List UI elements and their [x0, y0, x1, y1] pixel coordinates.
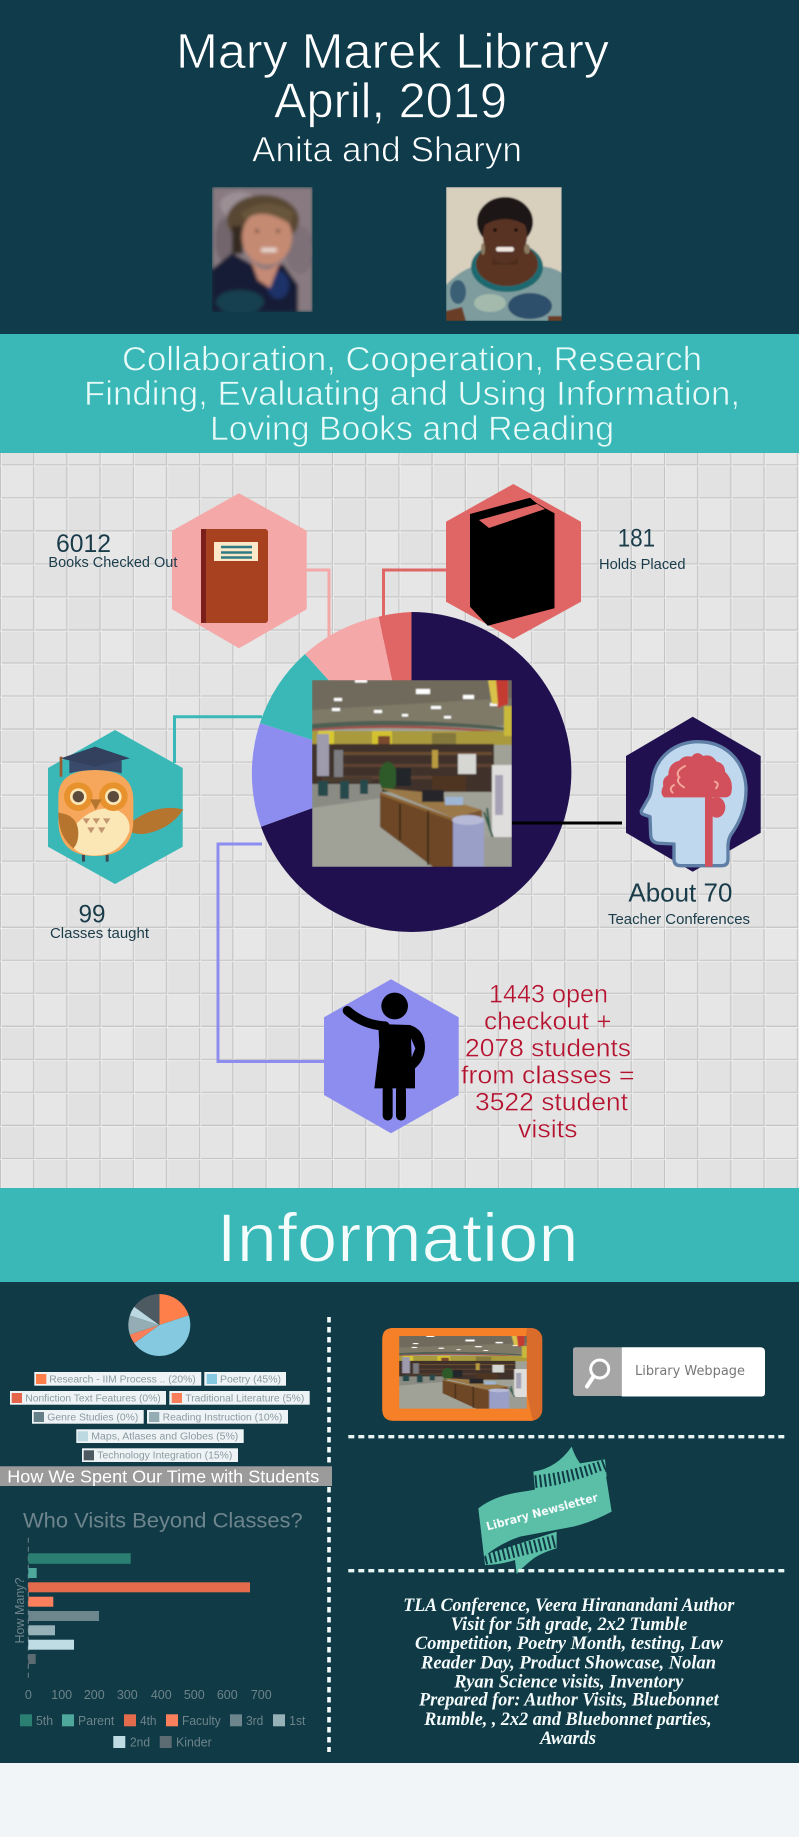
- vertical dotted divider: [327, 1317, 331, 1752]
- text block: events: Ryan Science visits, Inventory: [453, 1671, 684, 1692]
- axis values: 400: [151, 1688, 172, 1702]
- title: April, 2019: [274, 74, 507, 128]
- text block: events: Rumble, , 2x2 and Bluebonnet parties,: [423, 1709, 712, 1730]
- bar chart legend: Kinder: [176, 1736, 212, 1750]
- pie legend: Technology Integration (15%): [97, 1451, 232, 1462]
- stat: teacher conferences: [608, 878, 750, 928]
- text block: events: Competition, Poetry Month, testing, Law: [415, 1633, 723, 1654]
- title: [176, 25, 610, 170]
- connector: classes taught: [174, 717, 262, 763]
- ribbon: library newsletter: [478, 1447, 612, 1574]
- search box: library webpage: [573, 1347, 765, 1396]
- icon: student hexagon: [324, 979, 459, 1133]
- pie legend: Maps, Atlases and Globes (5%): [91, 1432, 238, 1443]
- footer strip: [0, 1763, 799, 1837]
- connector: teacher conferences: [512, 822, 622, 824]
- bar chart legend: 5th: [36, 1714, 53, 1728]
- icon: black book hexagon: [446, 484, 581, 639]
- pie legend: Nonfiction Text Features (0%): [25, 1393, 161, 1404]
- stat: teacher conferences: Teacher Conferences: [608, 911, 750, 928]
- pie legend: Poetry (45%): [220, 1374, 281, 1385]
- axis values: 0: [25, 1688, 32, 1702]
- heading band: Information: [0, 1188, 799, 1282]
- banner: themes: Collaboration, Cooperation, Research: [122, 340, 702, 378]
- stat: student visits: checkout +: [484, 1007, 612, 1035]
- icon: head with brain hexagon: [626, 717, 761, 872]
- stat: books checked out: 6012: [56, 530, 111, 558]
- pie legend: Reading Instruction (10%): [163, 1412, 282, 1423]
- bar chart legend: 4th: [140, 1714, 157, 1728]
- axis values: 100: [51, 1688, 72, 1702]
- framed library photo: [382, 1328, 542, 1421]
- caption: how we spent our time: How We Spent Our Time with Students: [7, 1466, 320, 1486]
- stat: teacher conferences: About 70: [628, 878, 732, 908]
- text block: events: [403, 1595, 735, 1749]
- axis values: [25, 1688, 272, 1702]
- search box: library webpage: Library Webpage: [635, 1364, 745, 1379]
- banner: themes: Finding, Evaluating and Using Information,: [84, 375, 740, 413]
- axis values: 300: [117, 1688, 138, 1702]
- dashed divider lower: [348, 1569, 784, 1572]
- bar chart legend: Faculty: [182, 1714, 221, 1728]
- bar chart legend: [20, 1714, 306, 1750]
- title: Mary Marek Library: [176, 25, 610, 79]
- pie legend: Genre Studies (0%): [47, 1412, 138, 1423]
- icon: red book hexagon: [172, 493, 307, 648]
- text block: events: Awards: [539, 1728, 596, 1749]
- pie chart: time with students: [128, 1294, 190, 1356]
- icon: owl hexagon: [48, 730, 183, 884]
- text block: events: Prepared for: Author Visits, Bluebonnet: [418, 1690, 719, 1711]
- stat: classes taught: [50, 900, 150, 942]
- stat: student visits: [461, 980, 634, 1144]
- panel: information section background: [0, 1282, 799, 1763]
- stat: books checked out: [48, 530, 178, 571]
- icon: magnifier: [587, 1360, 609, 1386]
- heading: who visits beyond classes: Who Visits Beyond Classes?: [23, 1509, 303, 1533]
- connector: student visits: [218, 844, 326, 1062]
- banner: themes: [0, 334, 799, 453]
- header panel: [0, 0, 799, 334]
- title: Anita and Sharyn: [252, 130, 522, 170]
- stat: holds placed: 181: [618, 525, 655, 553]
- axis label: How Many?: [13, 1577, 27, 1644]
- library photo: [312, 680, 512, 867]
- stat: classes taught: 99: [78, 900, 106, 928]
- bar chart legend: 1st: [289, 1714, 306, 1728]
- text block: events: Visit for 5th grade, 2x2 Tumble: [451, 1614, 688, 1635]
- stat: holds placed: Holds Placed: [599, 556, 686, 573]
- stat: student visits: 3522 student: [475, 1089, 628, 1117]
- stat: books checked out: Books Checked Out: [48, 554, 178, 571]
- axis values: 700: [251, 1688, 272, 1702]
- text block: events: TLA Conference, Veera Hiranandani Author: [403, 1595, 735, 1616]
- stat: student visits: 1443 open: [489, 980, 608, 1008]
- pie chart with library photo: [252, 612, 571, 932]
- heading band: Information: Information: [217, 1200, 579, 1277]
- axis values: 500: [184, 1688, 205, 1702]
- dashed divider upper: [348, 1435, 784, 1438]
- axis values: 600: [217, 1688, 238, 1702]
- pie legend: [10, 1372, 310, 1462]
- connector: books checked out: [306, 570, 329, 640]
- text block: events: Reader Day, Product Showcase, Nolan: [420, 1652, 716, 1673]
- photo: Sharyn: [446, 187, 562, 321]
- stat: student visits: from classes =: [461, 1061, 634, 1089]
- connector: holds placed: [384, 570, 446, 640]
- bar chart: visits: [13, 1538, 272, 1702]
- stat: student visits: visits: [518, 1116, 578, 1144]
- photo: Anita: [212, 187, 314, 314]
- ribbon: library newsletter: Library Newsletter: [485, 1490, 600, 1533]
- stat: classes taught: Classes taught: [50, 925, 150, 942]
- axis values: 200: [84, 1688, 105, 1702]
- banner: themes: Loving Books and Reading: [210, 410, 614, 448]
- panel: statistics tile background: [0, 453, 799, 1188]
- bar chart legend: Parent: [78, 1714, 115, 1728]
- bar chart legend: 2nd: [130, 1736, 150, 1750]
- bar chart legend: 3rd: [246, 1714, 263, 1728]
- pie legend: Research - IIM Process .. (20%): [49, 1374, 196, 1385]
- stat: student visits: 2078 students: [465, 1035, 631, 1063]
- stat: holds placed: [599, 525, 686, 573]
- pie legend: Traditional Literature (5%): [185, 1393, 304, 1404]
